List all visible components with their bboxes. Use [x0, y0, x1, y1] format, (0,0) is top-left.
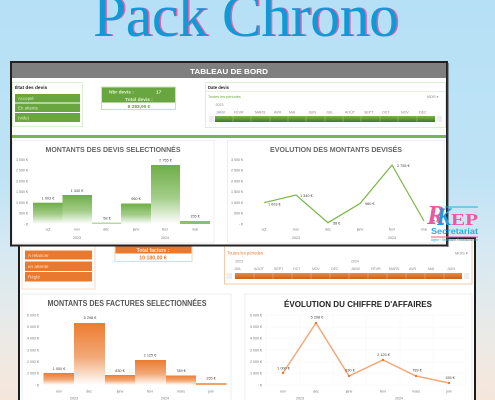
chart: quoted amounts evolution: 2 000 €	[231, 180, 243, 184]
logo: REP Secretariat: K	[436, 204, 453, 231]
chart: quoted amounts evolution: 155 €	[429, 220, 439, 224]
chart: quotes by month: 1 340 €	[71, 189, 84, 193]
chart: quoted amounts evolution: 1 340 €	[300, 194, 314, 198]
chart: revenue evolution: 5 298 €	[311, 316, 324, 320]
slicer: invoice date timeline: AVR	[409, 267, 417, 271]
kpi: total invoices	[115, 240, 192, 262]
chart: revenue evolution: janv	[345, 390, 352, 394]
chart: invoices by month: 2 125 €	[144, 354, 157, 358]
chart: quotes by month: mai	[192, 228, 198, 232]
slicer: quote date timeline: Toutes les périodes	[208, 95, 241, 99]
chart title: EVOLUTION DES MONTANTS DEVISÉS	[270, 145, 402, 154]
logo: REP Secretariat	[426, 200, 478, 242]
chart: quotes by month: janv	[132, 228, 139, 232]
chart: revenue evolution: 155 €	[445, 376, 456, 380]
chart: invoices by month: 6 000 €	[27, 314, 39, 318]
chart: quotes by month: 2 500 €	[16, 168, 28, 172]
logo: REP Secretariat: EP	[451, 210, 478, 229]
panel: upper window (quotes dashboard)	[11, 62, 448, 247]
chart: quoted amounts evolution: 2 500 €	[231, 168, 243, 172]
kpi: total invoices: Total facture :	[137, 248, 170, 254]
slicer: invoice date timeline: 2023	[235, 260, 243, 264]
chart: revenue evolution: févr	[380, 390, 387, 394]
chart: quotes by month: 2024	[161, 236, 169, 240]
chart: quotes by month: 2 000 €	[16, 180, 28, 184]
slicer: invoice status: en attente	[28, 264, 49, 269]
header bar: TABLEAU DE BORD	[190, 67, 269, 76]
chart: quotes by month: nov	[74, 228, 80, 232]
chart: revenue evolution: 5 000 €	[250, 325, 262, 329]
chart: quotes by month: 960 €	[131, 197, 142, 201]
chart: quoted amounts evolution: - €	[239, 222, 243, 226]
kpi: total invoices: 10 180,00 €	[139, 256, 167, 262]
chart: quotes by month: oct	[46, 228, 50, 232]
slicer: quote date timeline	[206, 82, 446, 128]
slicer: invoice date timeline: AOÛT	[254, 266, 265, 271]
slicer: invoice date timeline: MOIS ▾	[455, 252, 468, 256]
slicer: invoice date timeline: 2024	[351, 260, 359, 264]
slicer: invoice date timeline: JANV	[351, 267, 361, 271]
chart: invoices by month: nov	[56, 390, 62, 394]
divider bar	[12, 135, 446, 138]
slicer: invoice date timeline: MARS	[389, 267, 400, 271]
slicer: quote date timeline: FÉVR	[234, 110, 244, 114]
chart: quoted amounts evolution: 58 €	[333, 222, 341, 226]
chart: revenue evolution: 2 125 €	[377, 353, 391, 357]
logo: REP Secretariat: Secretariat	[431, 226, 478, 236]
chart: revenue evolution: 1 000 €	[277, 366, 291, 370]
chart: quotes by month: 58 €	[103, 216, 112, 220]
chart: invoices by month: 155 €	[206, 376, 217, 380]
chart: revenue evolution: 1 000 €	[250, 372, 262, 376]
chart: quotes by month: 500 €	[19, 212, 28, 216]
kpi: quote count and total: 6 283,00 €	[128, 104, 151, 110]
chart: invoices by month: 3 000 €	[27, 348, 39, 352]
slicer: quote date timeline: DÉC	[419, 110, 427, 114]
slicer: invoice status: A relancer	[28, 253, 49, 258]
chart: quotes by month: déc	[103, 228, 109, 232]
chart: quoted amounts evolution: 1 500 €	[231, 190, 243, 194]
kpi: quote count and total: 17	[156, 90, 162, 96]
chart: revenue evolution: 789 €	[412, 368, 423, 372]
slicer: quote date timeline: Date devis	[208, 85, 230, 90]
slicer: invoice date timeline: DÉC	[331, 266, 339, 271]
chart: quoted amounts evolution: 3 000 €	[231, 158, 243, 162]
slicer: quote date timeline: JUIN	[308, 110, 316, 114]
chart: revenue evolution: 3 000 €	[250, 348, 262, 352]
chart: revenue evolution: juin	[445, 390, 452, 394]
chart: quotes by month: 2023	[73, 236, 81, 240]
slicer: invoice status	[22, 240, 95, 289]
kpi: quote count and total: Total devis :	[125, 97, 153, 103]
slicer: quote date timeline: JUIL	[326, 110, 333, 114]
chart: quoted amounts evolution: 1 000 €	[231, 201, 243, 205]
chart: quotes by month: 1 003 €	[42, 196, 55, 200]
kpi: quote count and total: Nbr devis :	[109, 90, 134, 96]
chart: quoted amounts evolution: 2023	[292, 236, 300, 240]
slicer: quote status: En attente	[18, 106, 39, 110]
chart: quoted amounts evolution: oct	[262, 228, 266, 232]
chart: revenue evolution: 4 000 €	[250, 336, 262, 340]
chart: invoices by month: 830 €	[115, 369, 126, 373]
chart: quotes by month: 3 000 €	[16, 158, 28, 162]
slicer: quote date timeline: AOÛT	[345, 110, 356, 114]
chart: invoices by month: 4 000 €	[27, 336, 39, 340]
chart: quoted amounts evolution: nov	[293, 228, 299, 232]
chart: invoices by month: déc	[86, 390, 92, 394]
slicer: invoice date timeline	[224, 240, 472, 284]
chart: revenue evolution: 2 000 €	[250, 360, 262, 364]
slicer: invoice date timeline: NOV	[312, 267, 320, 271]
chart: quoted amounts evolution: 2024	[388, 236, 396, 240]
logo: REP Secretariat: Agent · Secrétaire Professionnelle	[431, 238, 478, 242]
chart: invoices by month: 5 000 €	[27, 325, 39, 329]
chart: invoices by month: janv	[116, 390, 123, 394]
chart: invoices by month: 789 €	[176, 369, 187, 373]
slicer: quote date timeline: MAI	[289, 110, 295, 114]
chart: invoices by month: 1 000 €	[27, 372, 39, 376]
slicer: invoice date timeline: OCT	[293, 267, 301, 271]
slicer: quote date timeline: SEPT	[364, 110, 374, 114]
chart: quoted amounts evolution	[228, 140, 444, 243]
chart: quotes by month: 155 €	[190, 214, 201, 218]
chart: revenue evolution	[245, 294, 472, 400]
chart: revenue evolution: 6 000 €	[250, 314, 262, 318]
slicer: invoice date timeline: SEPT	[274, 267, 284, 271]
slicer: quote status	[12, 82, 82, 126]
chart: invoices by month: mars	[177, 390, 185, 394]
chart: invoices by month: juin	[207, 390, 214, 394]
chart: revenue evolution: nov	[280, 390, 286, 394]
slicer: quote date timeline: MARS	[255, 110, 266, 114]
logo: REP Secretariat: R	[426, 200, 445, 230]
chart: revenue evolution: 830 €	[345, 368, 356, 372]
slicer: invoice date timeline: JUIN	[447, 267, 455, 271]
chart: invoices by month	[22, 294, 231, 400]
chart: revenue evolution: déc	[313, 390, 319, 394]
chart: quotes by month: - €	[24, 222, 28, 226]
chart: quoted amounts evolution: déc	[325, 228, 331, 232]
slicer: quote date timeline: JANV	[216, 110, 226, 114]
slicer: invoice date timeline: MAI	[428, 267, 434, 271]
slicer: invoice date timeline: FÉVR	[371, 266, 381, 271]
chart: quotes by month: 1 500 €	[16, 190, 28, 194]
chart: revenue evolution: mars	[412, 390, 420, 394]
chart title: MONTANTS DES FACTURES SELECTIONNÉES	[48, 299, 207, 308]
slicer: invoice date timeline: Toutes les périodes	[227, 250, 263, 256]
chart: invoices by month: 1 000 €	[53, 367, 66, 371]
chart: quotes by month	[12, 140, 214, 243]
chart title: MONTANTS DES DEVIS SELECTIONNÉS	[46, 145, 180, 154]
slicer: invoice date timeline: JUIL	[234, 267, 241, 271]
chart: quoted amounts evolution: janv	[356, 228, 363, 232]
chart: quoted amounts evolution: 1 003 €	[268, 202, 282, 206]
chart: quoted amounts evolution: 2 755 €	[397, 164, 411, 168]
slicer: quote status: (vide)	[18, 116, 30, 120]
chart: invoices by month: févr	[147, 390, 154, 394]
chart: quoted amounts evolution: 500 €	[234, 212, 243, 216]
chart: quoted amounts evolution: mai	[421, 228, 427, 232]
chart title: ÉVOLUTION DU CHIFFRE D'AFFAIRES	[284, 300, 433, 309]
header bar	[12, 63, 446, 78]
chart: revenue evolution: - €	[258, 384, 262, 388]
slicer: quote date timeline: 2023	[216, 103, 224, 107]
slicer: quote date timeline: NOV	[401, 110, 409, 114]
slicer: quote date timeline: MOIS ▾	[427, 95, 439, 99]
chart: quotes by month: 2 755 €	[159, 158, 173, 162]
slicer: quote status: État des devis	[15, 83, 48, 91]
chart: quotes by month: févr	[162, 228, 169, 232]
kpi: quote count and total	[102, 87, 176, 110]
chart: quoted amounts evolution: févr	[389, 228, 396, 232]
slicer: quote date timeline: AVR	[274, 110, 282, 114]
chart: quoted amounts evolution: 960 €	[365, 202, 375, 206]
slicer: invoice status: Réglé	[28, 274, 40, 280]
slicer: quote date timeline: OCT	[382, 110, 390, 114]
chart: invoices by month: 2 000 €	[27, 360, 39, 364]
panel: lower window (invoices dashboard)	[19, 238, 475, 400]
chart: invoices by month: - €	[35, 384, 39, 388]
chart: invoices by month: 5 298 €	[84, 316, 97, 320]
slicer: quote status: Accepté	[18, 96, 34, 101]
chart: quotes by month: 1 000 €	[16, 201, 28, 205]
